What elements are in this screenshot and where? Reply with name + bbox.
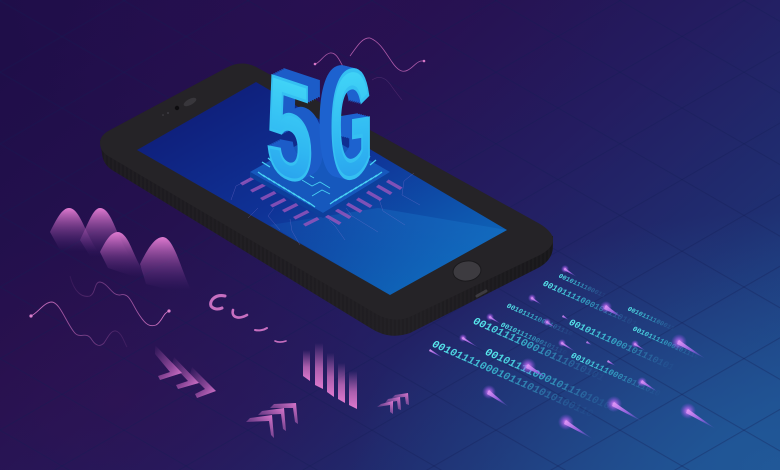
- crescent arcs: [211, 296, 286, 342]
- binary data streams: 00101111000101110101: [566, 317, 677, 373]
- chevrons pointing up right, small: [377, 393, 409, 414]
- glowing data particles: [429, 265, 716, 439]
- phone side edge: [100, 140, 553, 336]
- chevrons pointing down right: [155, 345, 216, 398]
- binary data streams: 00101111000101110101: [540, 279, 639, 329]
- binary data streams: 00101111000101110: [498, 322, 568, 358]
- binary data streams: 0010111100011: [557, 273, 607, 299]
- screen light wedge: [270, 208, 507, 295]
- 5G 3D title: [266, 36, 373, 215]
- faint circuit traces: [231, 173, 420, 245]
- pink signal waves: [29, 276, 171, 347]
- top signal waves: [314, 38, 425, 100]
- binary data streams: 00101111000101110: [630, 326, 700, 362]
- pink mountain chart: [50, 208, 194, 296]
- binary data streams: 001011110001011101010100110: [429, 339, 595, 420]
- pink bar chart: [303, 343, 357, 409]
- binary data streams: 00101111000101110: [504, 303, 574, 339]
- home button: [452, 259, 482, 283]
- letter G: G: [330, 36, 373, 213]
- binary data streams: [429, 273, 700, 420]
- binary data streams: 0010111100010111010: [568, 351, 662, 399]
- binary data streams: 0010111100010111010101: [470, 316, 607, 384]
- digit 5: 5: [266, 43, 313, 215]
- phone top face: [100, 64, 553, 320]
- chip body: [250, 132, 390, 213]
- binary data streams: 0010111100010111010101: [482, 347, 619, 415]
- phone screen: [137, 82, 507, 295]
- smartphone: [100, 64, 553, 336]
- pink chip pins: [240, 176, 402, 226]
- binary data streams: 0010111100011: [626, 306, 676, 332]
- chip cyan traces: [258, 156, 382, 207]
- speaker and camera: [162, 96, 198, 116]
- charging port: [477, 291, 486, 296]
- chevrons pointing up right, large: [246, 403, 298, 438]
- microchip circuit: [231, 132, 420, 245]
